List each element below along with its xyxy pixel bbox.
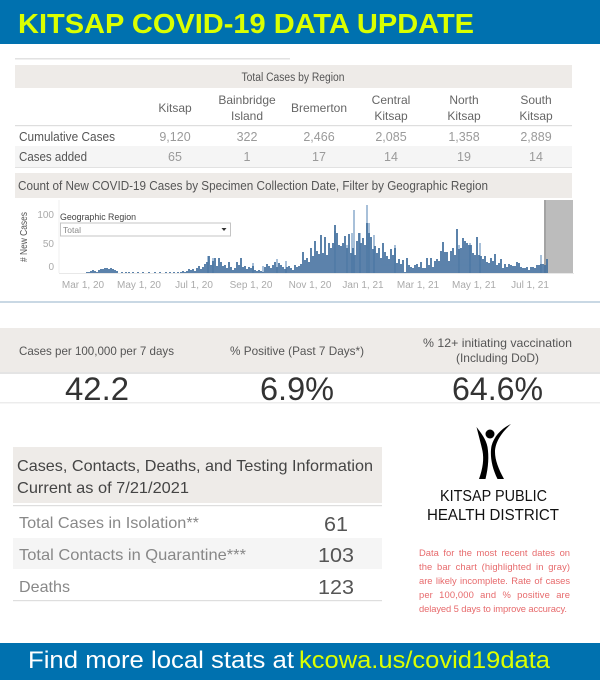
y axis labels: 50	[43, 239, 54, 250]
column headers: Kitsap	[158, 101, 192, 115]
note: data caveat in red: delayed 5 days to improve accuracy.	[419, 603, 567, 614]
note: data caveat in red: Data for the most recent dates on	[419, 547, 570, 558]
column headers: Bainbridge	[218, 93, 276, 107]
x axis labels: May 1, 20	[117, 280, 161, 291]
row: cases added	[19, 150, 543, 164]
row: isolation: 61	[324, 514, 348, 536]
panel: total cases by region table	[15, 65, 572, 168]
note: data caveat in red: are likely incomplete. Rate of cases	[419, 575, 570, 586]
row: quarantine: Total Contacts in Quarantine***	[19, 547, 246, 564]
panel: key metrics	[0, 328, 600, 407]
row: deaths	[19, 577, 354, 599]
row: cumulative cases	[19, 130, 552, 144]
chart heading: Count of New COVID-19 Cases by Specimen Collection Date, Filter by Geographic Region	[18, 179, 488, 193]
x axis labels: Nov 1, 20	[289, 280, 332, 291]
column headers	[158, 93, 553, 123]
row: cumulative cases: 2,889	[520, 130, 552, 144]
table heading: Total Cases by Region	[242, 72, 344, 84]
column headers: Bremerton	[291, 101, 347, 115]
footer text: Find more local stats at	[28, 647, 294, 674]
title: KITSAP COVID-19 DATA UPDATE	[18, 8, 474, 39]
x axis labels: May 1, 21	[452, 280, 496, 291]
metric: cases per 100,000: 42.2	[65, 371, 129, 407]
x axis labels: Jul 1, 20	[175, 280, 213, 291]
logo wordmark: KITSAP PUBLIC	[440, 488, 547, 505]
note: data caveat in red: per 100,000 and % positive are	[419, 589, 570, 600]
x axis labels: Mar 1, 20	[62, 280, 105, 291]
logo: Kitsap Public Health District: HEALTH DISTRICT	[427, 507, 560, 524]
row: cases added: Cases added	[19, 150, 87, 164]
column headers: Kitsap	[447, 109, 481, 123]
panel: new cases bar chart	[15, 173, 574, 291]
x axis labels: Sep 1, 20	[230, 280, 273, 291]
row: isolation	[19, 514, 348, 536]
row: cumulative cases: 9,120	[159, 130, 191, 144]
column headers: Central	[372, 93, 410, 107]
header banner	[0, 0, 600, 44]
column headers: North	[449, 93, 479, 107]
table heading: Cases, Contacts, Deaths, and Testing Information	[17, 458, 373, 475]
x axis labels: Jan 1, 21	[342, 280, 384, 291]
row: cumulative cases: 2,085	[375, 130, 407, 144]
footer link: kcowa.us/covid19data	[299, 647, 550, 674]
panel: cases, contacts, deaths table	[13, 447, 382, 601]
x axis labels: Mar 1, 21	[397, 280, 440, 291]
row: deaths: 123	[318, 577, 354, 599]
metric: cases per 100,000	[19, 344, 174, 407]
icon: figure with raised arms	[476, 424, 511, 479]
row: quarantine: 103	[318, 545, 354, 567]
bars: daily new cases	[87, 223, 547, 273]
row: cases added: 14	[529, 150, 543, 164]
row: quarantine	[19, 545, 354, 567]
row: cumulative cases: 1,358	[448, 130, 480, 144]
y axis title: # New Cases	[19, 212, 30, 262]
column headers: South	[520, 93, 552, 107]
note: data caveat in red	[419, 547, 570, 614]
column headers: Kitsap	[519, 109, 553, 123]
row: cumulative cases: Cumulative Cases	[19, 130, 115, 144]
metric: vaccination: 64.6%	[452, 371, 543, 407]
y axis labels: 0	[48, 262, 54, 273]
row: cumulative cases: 322	[237, 130, 257, 144]
footer banner	[0, 643, 600, 680]
metric: vaccination	[423, 336, 572, 407]
y axis labels: 100	[37, 210, 54, 221]
x axis labels: Jul 1, 21	[511, 280, 549, 291]
logo: Kitsap Public Health District	[427, 424, 560, 524]
row: cumulative cases: 2,466	[303, 130, 335, 144]
metric: vaccination: (Including DoD)	[456, 351, 539, 365]
geographic region filter	[60, 212, 230, 236]
bars: light spikes	[208, 205, 541, 273]
row: deaths: Deaths	[19, 579, 70, 596]
metric: percent positive: % Positive (Past 7 Days*)	[230, 344, 364, 358]
row: cases added: 17	[312, 150, 326, 164]
row: cases added: 14	[384, 150, 398, 164]
panel: cases, contacts, deaths table: Current as of 7/21/2021	[17, 480, 189, 497]
metric: percent positive: 6.9%	[260, 371, 334, 407]
y axis labels	[37, 210, 54, 273]
metric: vaccination: % 12+ initiating vaccination	[423, 336, 572, 350]
column headers: Island	[231, 109, 263, 123]
x axis labels	[62, 280, 549, 291]
column headers: Kitsap	[374, 109, 408, 123]
metric: percent positive	[230, 344, 364, 407]
row: cases added: 65	[168, 150, 182, 164]
gray incomplete data band	[544, 200, 573, 273]
row: cases added: 19	[457, 150, 471, 164]
row: cases added: 1	[244, 150, 251, 164]
row: isolation: Total Cases in Isolation**	[19, 515, 199, 532]
geographic region filter: Geographic Region	[60, 212, 136, 223]
geographic region filter: Total	[63, 225, 81, 235]
metric: cases per 100,000: Cases per 100,000 per 7 days	[19, 344, 174, 358]
note: data caveat in red: the bar chart (highlighted in gray)	[419, 561, 570, 572]
